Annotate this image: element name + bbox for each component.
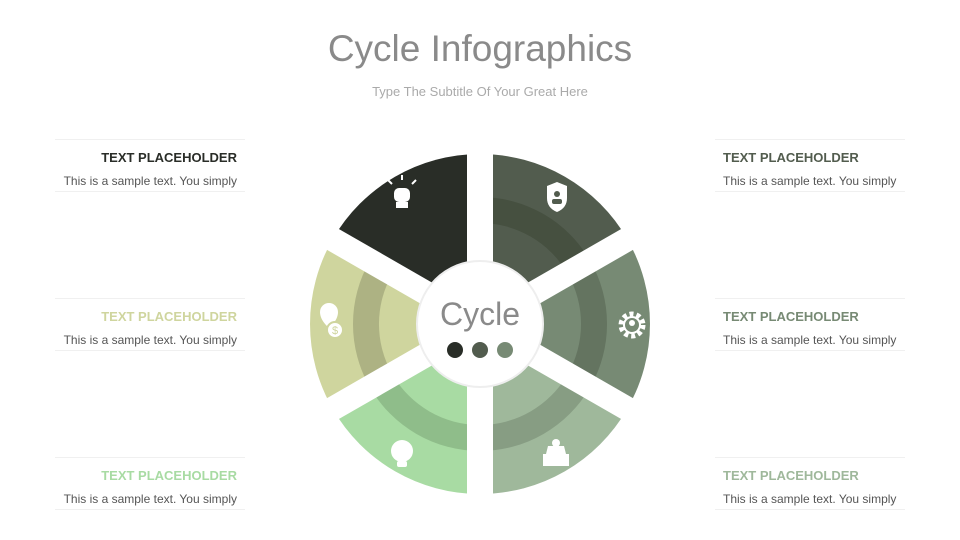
center circle — [417, 261, 543, 387]
subtitle: Type The Subtitle Of Your Great Here — [372, 84, 588, 99]
text block: right 2 — [715, 298, 905, 351]
text block: right 1: TEXT PLACEHOLDER — [723, 150, 859, 165]
icon: brain bulb — [391, 440, 413, 467]
text block: right 3: TEXT PLACEHOLDER — [723, 468, 859, 483]
segment: bottom-left — [333, 324, 480, 494]
segment: bottom-right — [480, 324, 627, 494]
segment: left — [310, 239, 480, 409]
segment: top-left — [333, 154, 480, 324]
icon: location dollar: $ — [332, 325, 338, 337]
text block: left 1: TEXT PLACEHOLDER — [101, 150, 237, 165]
center circle: Cycle — [440, 296, 520, 332]
icon: shield user — [547, 182, 567, 212]
icon: gear — [621, 314, 643, 336]
icon: idea fist — [388, 175, 416, 208]
text block: right 1: This is a sample text. You simply — [723, 174, 896, 188]
text block: left 2: TEXT PLACEHOLDER — [101, 309, 237, 324]
title: Cycle Infographics — [328, 28, 632, 69]
icon: location dollar — [320, 303, 343, 338]
icon: presenter podium — [543, 439, 569, 466]
text block: left 1: This is a sample text. You simply — [64, 174, 237, 188]
text block: right 1 — [715, 139, 905, 192]
text block: left 1 — [55, 139, 245, 192]
segment: top-right — [480, 154, 627, 324]
text block: right 2: TEXT PLACEHOLDER — [723, 309, 859, 324]
text block: left 2: This is a sample text. You simply — [64, 333, 237, 347]
text block: right 2: This is a sample text. You simply — [723, 333, 896, 347]
text block: right 3: This is a sample text. You simply — [723, 492, 896, 506]
text block: left 2 — [55, 298, 245, 351]
text block: left 3: TEXT PLACEHOLDER — [101, 468, 237, 483]
text block: left 3: This is a sample text. You simply — [64, 492, 237, 506]
segment: right — [480, 239, 650, 409]
text block: left 3 — [55, 457, 245, 510]
text block: right 3 — [715, 457, 905, 510]
